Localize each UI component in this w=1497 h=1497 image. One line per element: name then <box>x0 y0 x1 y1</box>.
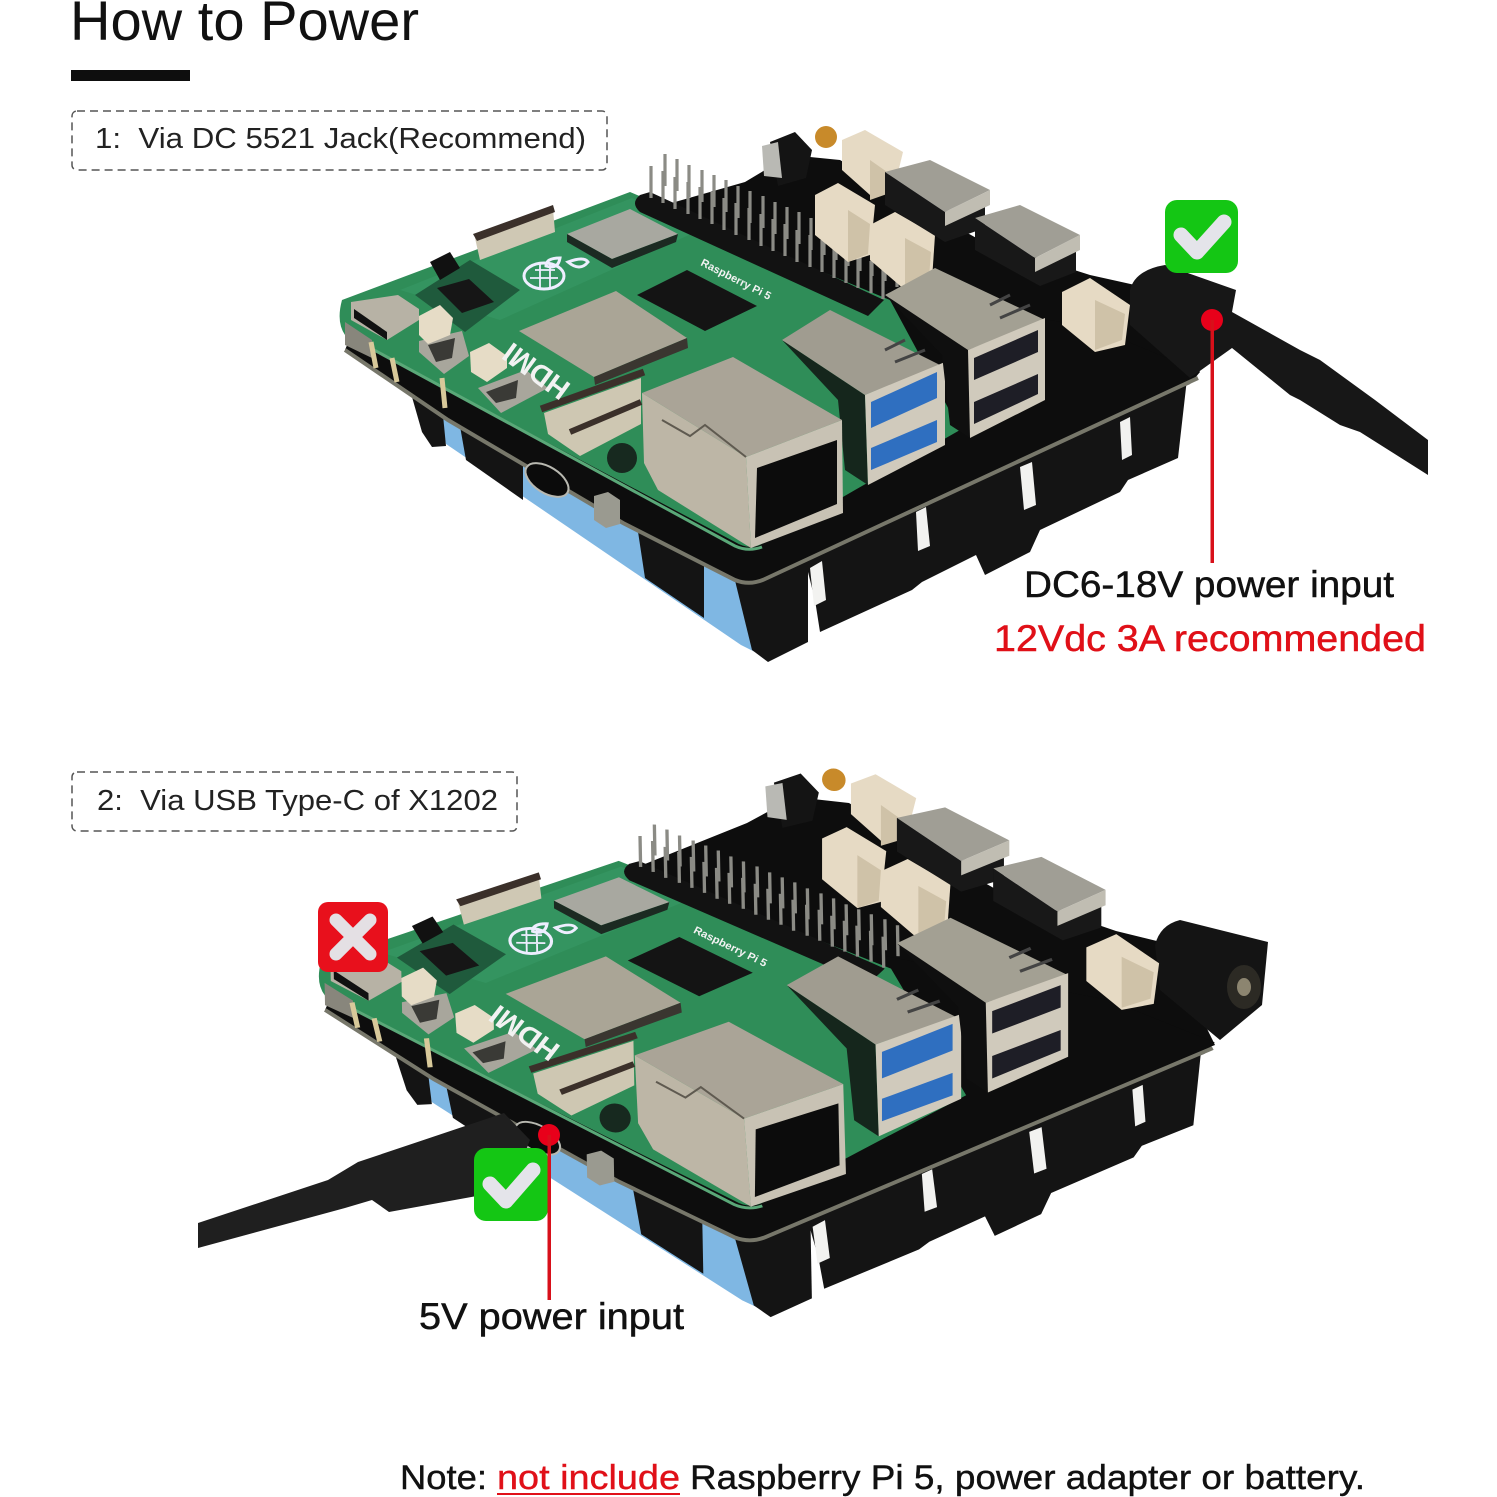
switch <box>762 132 812 186</box>
camera connectors <box>541 372 644 473</box>
Raspberry Pi board <box>340 192 960 549</box>
callout: DC power pointer <box>1201 309 1223 563</box>
callout text: recommended: 12Vdc 3A recommended <box>994 618 1426 659</box>
option 1 heading box <box>72 111 607 170</box>
rear connectors and USB <box>765 766 1159 1147</box>
white connectors <box>815 126 1130 352</box>
option 2 heading box <box>72 772 517 831</box>
callout: 5V pointer <box>538 1124 560 1300</box>
USB-C plug and cable <box>198 1113 530 1248</box>
option 1 heading box: 1: Via DC 5521 Jack(Recommend) <box>95 123 586 155</box>
Ethernet port <box>642 357 843 548</box>
title underline bar <box>71 70 190 81</box>
icon: green check <box>1165 200 1238 273</box>
chips and shields <box>430 205 757 385</box>
DC jack on right <box>1155 920 1268 1040</box>
callout text: DC input: DC6-18V power input <box>1024 564 1395 605</box>
icon: red cross <box>318 902 388 972</box>
HDMI silk text: HDMI <box>497 336 576 405</box>
rear part of expansion board <box>630 797 1215 1180</box>
ports on left edge <box>345 295 548 413</box>
panel: option 2 board assembly <box>316 766 1268 1323</box>
Raspberry Pi 5 silk text: Raspberry Pi 5 <box>691 925 769 970</box>
icon: green check <box>474 1148 548 1221</box>
note: Note: <box>400 1459 487 1497</box>
dual USB ports <box>782 268 1045 485</box>
note: not include <box>497 1459 680 1497</box>
battery cell <box>441 400 785 652</box>
option 2 heading box: 2: Via USB Type-C of X1202 <box>97 785 498 817</box>
Ethernet port and silk text <box>482 922 847 1208</box>
front part of board, Pi and connectors <box>393 1030 1207 1323</box>
DC barrel plug and cable <box>1130 265 1428 475</box>
callout text: 5V input: 5V power input <box>419 1296 685 1337</box>
GPIO header <box>635 154 897 316</box>
USB Type-C of X1202 <box>520 456 620 528</box>
HDMI silk text: HDMI <box>484 998 566 1066</box>
battery holders <box>410 370 1188 662</box>
rear USB ports <box>885 160 1080 286</box>
Pi board and front components <box>316 820 1218 1246</box>
note: Raspberry Pi 5, power adapter or battery. <box>690 1459 1365 1497</box>
Raspberry logo <box>524 258 588 289</box>
panel: option 1 board assembly <box>340 126 1200 662</box>
expansion board <box>345 155 1200 583</box>
note <box>400 1459 1365 1497</box>
Raspberry Pi 5 silk text: Raspberry Pi 5 <box>699 257 773 303</box>
